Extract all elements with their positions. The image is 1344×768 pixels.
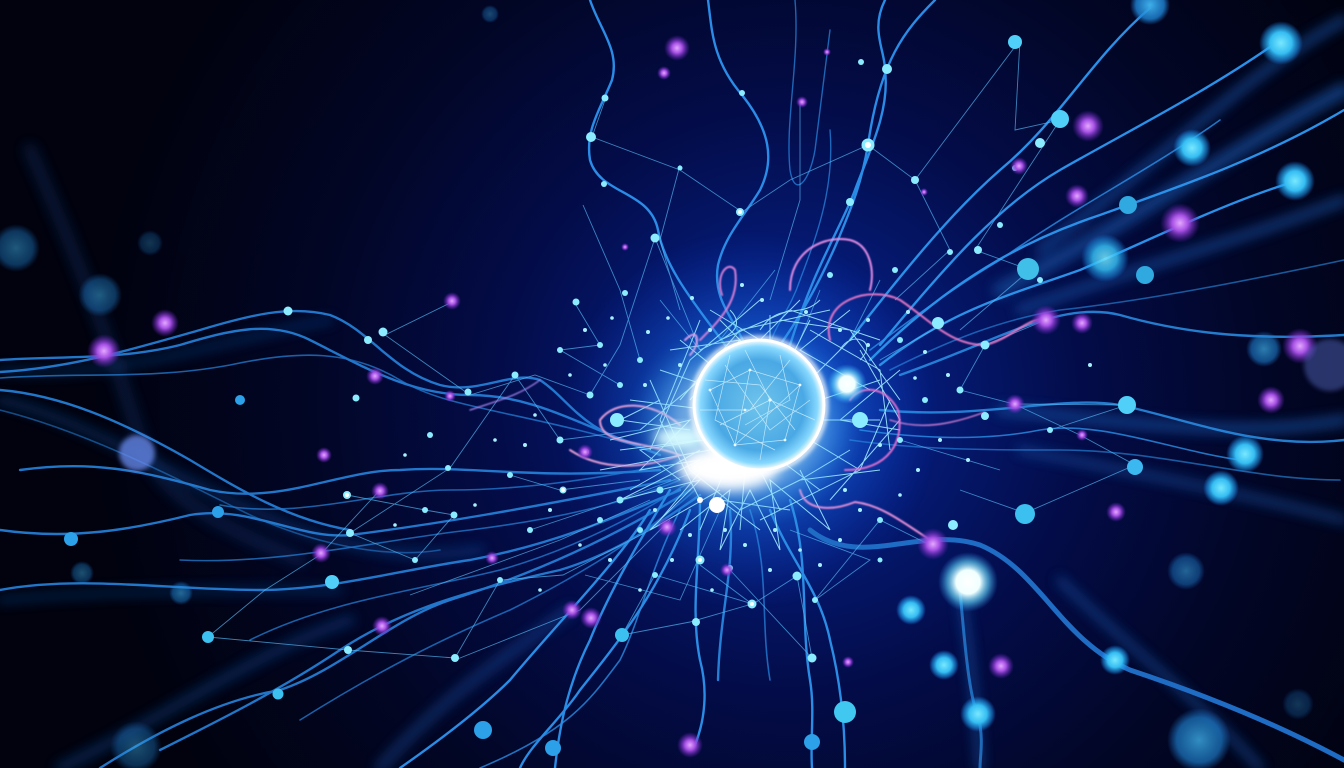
central blue glow xyxy=(550,230,950,610)
main fibers: right xyxy=(850,8,1344,480)
bright core halo xyxy=(630,325,860,525)
main fibers: top xyxy=(589,0,935,345)
small cyan nodes xyxy=(64,35,1154,756)
tiny particles around the core xyxy=(393,283,1092,592)
pink loops xyxy=(470,239,1046,540)
large bright node xyxy=(938,552,998,612)
bright white node accents xyxy=(345,142,1051,606)
main fibers: left xyxy=(0,311,700,768)
main fibers: bottom xyxy=(400,490,1344,768)
thin connecting web xyxy=(208,40,1135,660)
bright satellite node xyxy=(827,364,867,404)
central sphere xyxy=(692,338,826,472)
dense web around the core xyxy=(600,300,900,550)
